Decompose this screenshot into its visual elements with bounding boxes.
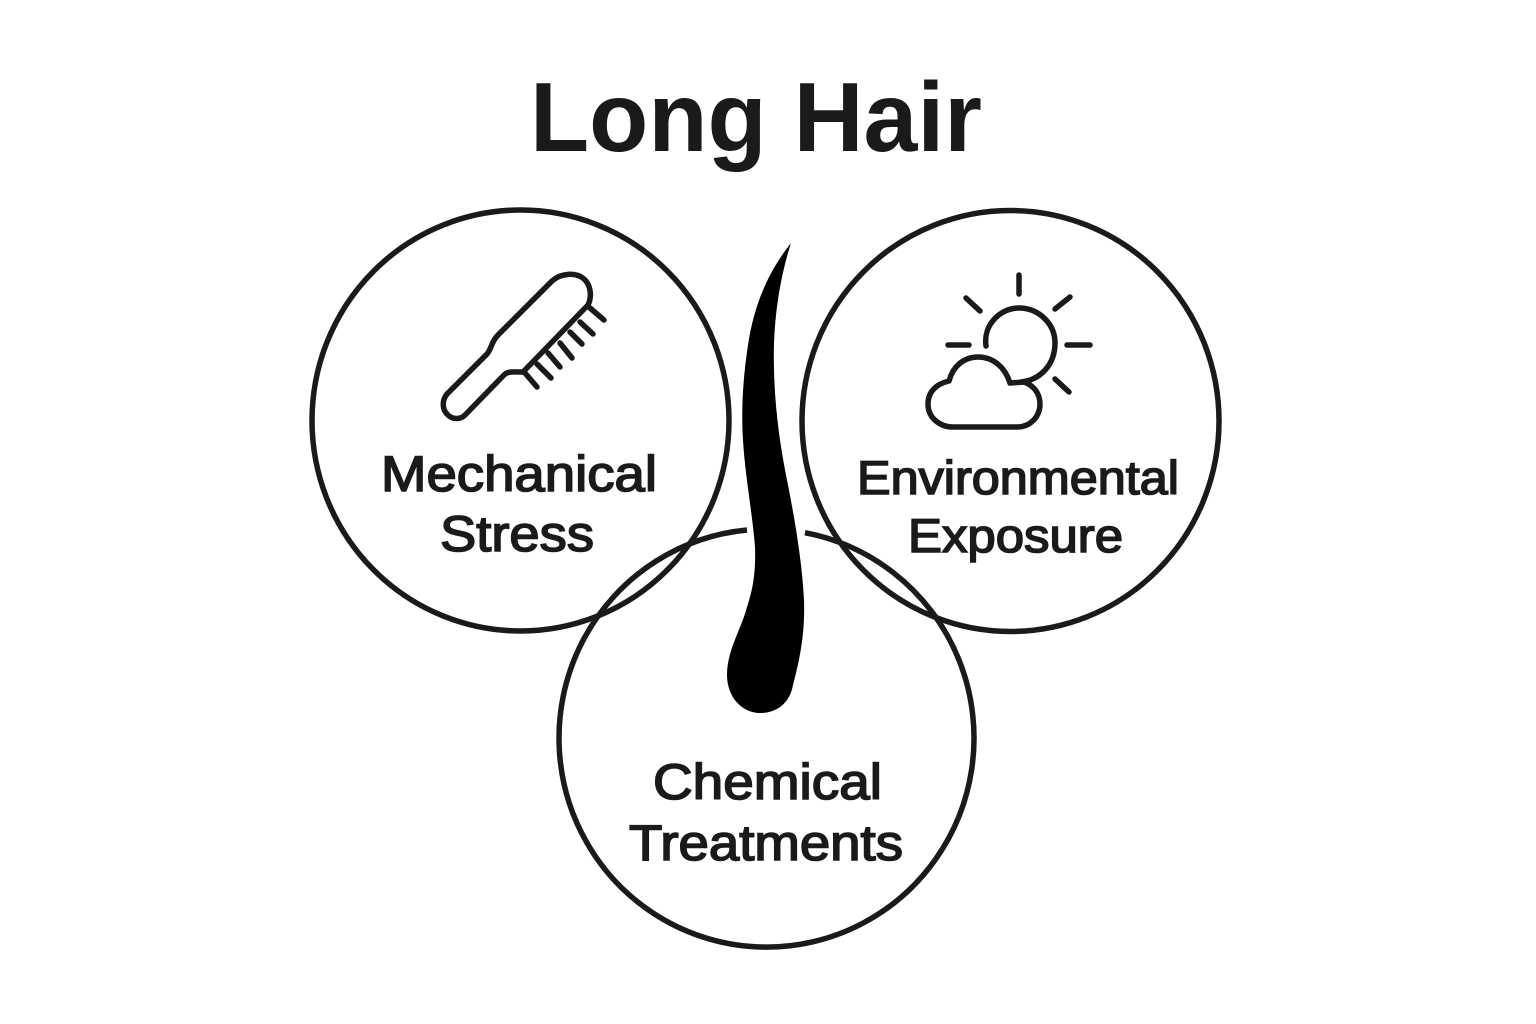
label: chemical treatments bbox=[629, 754, 903, 871]
circle: environmental exposure bbox=[802, 210, 1219, 632]
circle: chemical treatments bbox=[559, 530, 974, 947]
circle: mechanical stress bbox=[312, 210, 729, 631]
label: mechanical stress: Mechanical bbox=[381, 446, 657, 502]
label: environmental exposure bbox=[857, 451, 1179, 562]
label: mechanical stress bbox=[381, 446, 657, 562]
label: chemical treatments: Treatments bbox=[629, 815, 903, 871]
label: chemical treatments: Chemical bbox=[653, 754, 882, 810]
icon: sun behind cloud bbox=[928, 275, 1090, 427]
title: Long Hair bbox=[530, 62, 982, 172]
label: environmental exposure: Environmental bbox=[857, 451, 1179, 504]
label: mechanical stress: Stress bbox=[440, 506, 594, 562]
icon: hair strand bbox=[727, 243, 804, 713]
icon: hair brush bbox=[443, 274, 604, 418]
label: environmental exposure: Exposure bbox=[908, 509, 1123, 562]
